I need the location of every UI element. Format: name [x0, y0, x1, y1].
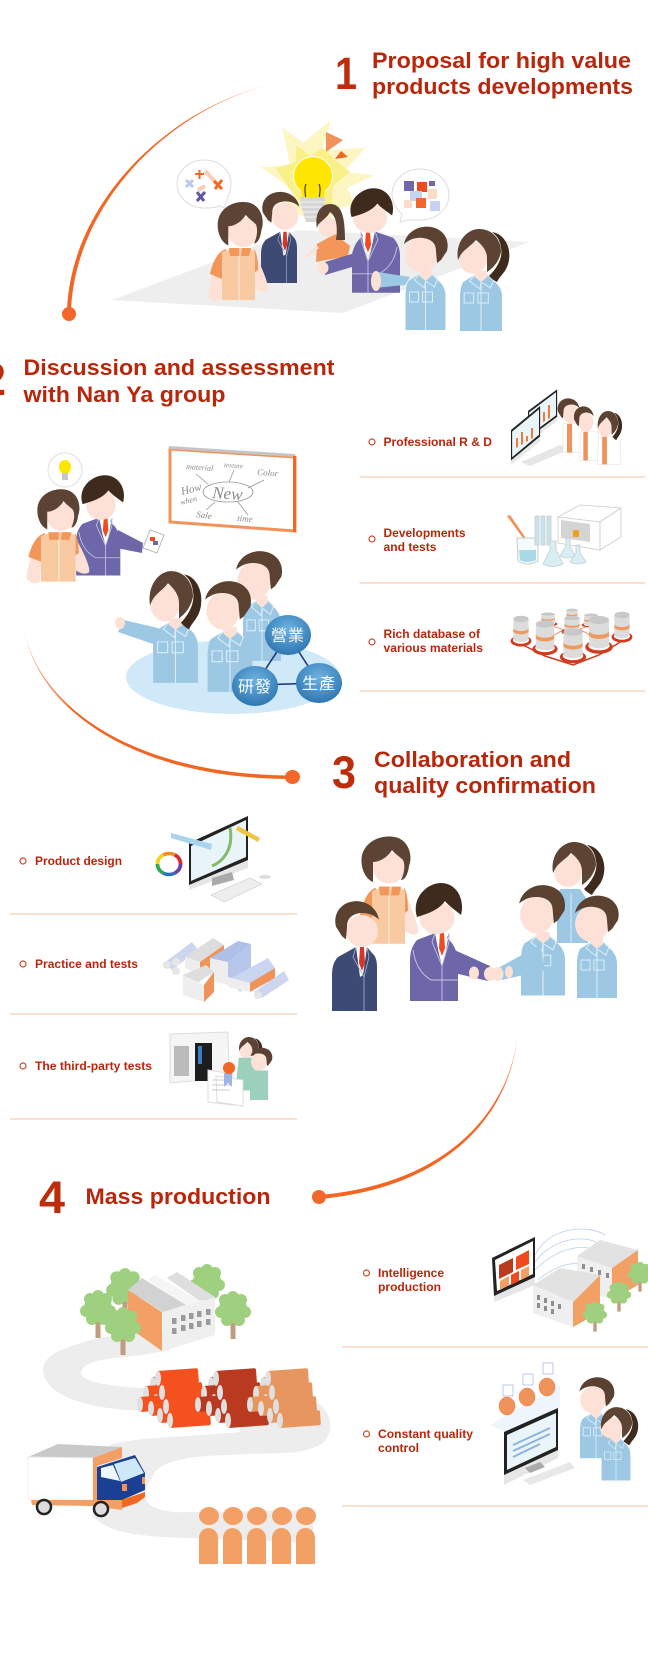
heading: step 4: Mass production	[86, 1184, 270, 1209]
rolled material stacks	[137, 1368, 321, 1428]
icon: factories and monitor	[492, 1229, 648, 1332]
team base ellipse	[126, 640, 340, 714]
dividers	[360, 477, 645, 691]
person: right worker man	[575, 896, 619, 998]
step 1 panel	[62, 48, 633, 331]
illustration: discussing at whiteboard	[27, 446, 342, 714]
heading: step 3: quality confirmation	[374, 773, 596, 798]
item: developments and tests: Developments	[384, 526, 466, 540]
icon: design monitor	[157, 816, 271, 902]
speech bubble: colour blocks	[392, 169, 449, 222]
icon: monitors and researchers	[511, 389, 622, 466]
person: blue worker man	[371, 227, 448, 330]
icon: quality monitoring	[490, 1363, 638, 1485]
whiteboard: Color	[257, 467, 279, 478]
item: professional R&D: Professional R & D	[384, 435, 492, 449]
item: developments and tests	[369, 505, 621, 566]
heading: step 1	[372, 48, 633, 99]
circle: production: 生產	[302, 675, 336, 693]
icon: database cylinders	[511, 609, 632, 665]
icon: light bulb burst	[261, 120, 375, 225]
whiteboard: texture	[224, 461, 244, 470]
person: front worker	[205, 581, 252, 692]
whiteboard	[169, 446, 296, 532]
number 4: 4	[39, 1172, 65, 1223]
list: step 2 items	[360, 389, 645, 691]
item: intelligence production: Intelligence	[378, 1266, 444, 1280]
person: worker woman pointing	[115, 571, 201, 683]
icon: test cabinet and certificate	[170, 1032, 272, 1106]
list: step 3 items	[10, 816, 297, 1119]
person: navy suit man	[261, 192, 299, 283]
heading: step 3	[374, 747, 596, 798]
bubble: idea bulb	[48, 453, 82, 487]
item: rich database: Rich database of	[384, 627, 481, 641]
illustration: handshake team	[332, 836, 619, 1011]
heading: step 1: Proposal for high value	[372, 48, 631, 73]
icon: lab equipment	[507, 505, 621, 566]
item: developments and tests: and tests	[384, 540, 437, 554]
whiteboard: when	[179, 494, 198, 507]
whiteboard: time	[237, 513, 253, 524]
person: orange vest woman	[27, 489, 89, 583]
road	[43, 1333, 330, 1543]
item: constant quality control: control	[378, 1441, 419, 1455]
item: third-party tests	[20, 1032, 272, 1106]
factory	[80, 1264, 251, 1355]
item: rich database	[369, 609, 632, 665]
item: intelligence production	[364, 1229, 648, 1332]
circle: sales: 營業	[271, 627, 305, 645]
list: step 4 items	[342, 1229, 648, 1506]
heading: step 2	[22, 355, 335, 407]
person: orange vest woman	[208, 202, 268, 302]
person: blue worker woman	[458, 229, 509, 331]
item: product design	[20, 816, 271, 902]
step 2 panel	[0, 354, 645, 784]
number 1: 1	[335, 48, 357, 99]
connector arc 1	[62, 79, 306, 321]
step 4 panel	[28, 1172, 648, 1564]
item: product design: Product design	[35, 854, 122, 868]
item: rich database: various materials	[384, 641, 483, 655]
person: orange vest woman	[358, 836, 418, 946]
diagram: three department circles	[232, 615, 342, 706]
heading: step 2: Discussion and assessment	[24, 355, 335, 380]
icon: production machines	[163, 938, 289, 1002]
floor	[112, 230, 529, 313]
step 3 panel	[10, 747, 619, 1204]
truck	[28, 1444, 145, 1516]
connector arc 2	[24, 627, 300, 784]
item: third-party tests: The third-party tests	[35, 1059, 152, 1073]
whiteboard: New	[211, 483, 244, 504]
person: small orange woman	[306, 204, 350, 262]
item: professional R&D	[369, 389, 622, 466]
person: purple suit man shaking hands	[410, 883, 496, 1001]
heading: step 3: Collaboration and	[374, 747, 571, 772]
speech bubble: ideas	[177, 160, 231, 209]
circle: R&D: 研發	[238, 678, 272, 696]
whiteboard: material	[186, 462, 214, 473]
heading: step 2: with Nan Ya group	[22, 382, 226, 407]
item: practice and tests	[20, 938, 289, 1002]
illustration: factory to customers	[28, 1264, 330, 1564]
person: blue worker man shaking hands	[492, 885, 565, 995]
person: back worker	[236, 551, 282, 661]
item: intelligence production: production	[378, 1280, 441, 1294]
illustration: team meeting	[112, 120, 529, 331]
whiteboard: How	[179, 481, 204, 498]
dividers	[342, 1347, 648, 1506]
person: purple suit man with tablet	[76, 475, 164, 576]
item: constant quality control	[364, 1363, 638, 1485]
customers row	[199, 1507, 316, 1564]
item: practice and tests: Practice and tests	[35, 957, 138, 971]
item: constant quality control: Constant quality	[378, 1427, 473, 1441]
person: ponytail worker woman	[553, 842, 604, 943]
heading: step 1: products developments	[372, 74, 633, 99]
number 3: 3	[332, 747, 356, 798]
connector arc 3	[312, 1032, 518, 1204]
person: purple suit man	[318, 188, 400, 293]
dividers	[10, 914, 297, 1119]
whiteboard: Sale	[196, 509, 212, 521]
person: navy suit man	[332, 901, 379, 1011]
